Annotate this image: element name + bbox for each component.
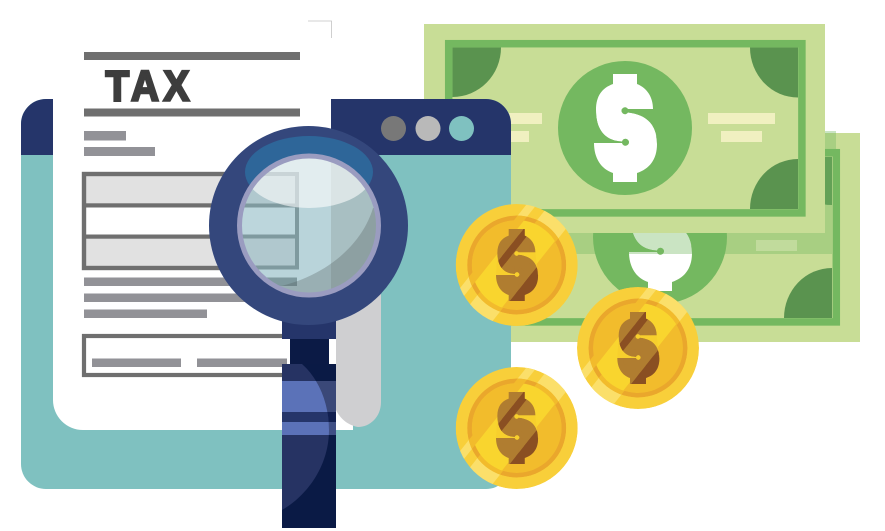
coin dollar sign: $	[498, 226, 536, 300]
lens glass	[242, 158, 376, 292]
form seen through lens	[242, 172, 299, 286]
bill corner: bottom right	[750, 159, 798, 209]
signature box	[84, 336, 299, 375]
window button: grey	[381, 116, 406, 141]
coin top	[456, 204, 578, 326]
coin right	[577, 287, 699, 409]
lens glare	[253, 158, 366, 208]
form table	[84, 174, 297, 268]
bill centre medallion	[558, 61, 692, 195]
text bars below form	[84, 278, 297, 318]
heading rule bottom	[84, 108, 300, 116]
coin dollar sign: $	[498, 389, 536, 463]
paper shadow	[331, 250, 381, 427]
bill dollar sign: $	[597, 68, 653, 180]
window button: light grey	[416, 116, 440, 141]
window title bar	[21, 99, 511, 155]
coin dollar sign: $	[498, 389, 536, 463]
lens rim	[240, 156, 378, 295]
coin dollar sign: $	[619, 309, 657, 383]
lens frame	[209, 126, 408, 325]
coin dollar sign: $	[498, 226, 536, 300]
paper sheet	[53, 21, 353, 430]
browser window	[21, 99, 511, 489]
heading: TAX: TAX	[106, 62, 189, 110]
tax document	[53, 21, 381, 430]
handle neck	[290, 339, 329, 364]
bill right text lines	[708, 113, 775, 142]
heading rule top	[84, 52, 300, 60]
frame highlight	[245, 136, 373, 208]
short text bars	[84, 131, 155, 156]
window body	[21, 99, 511, 489]
window button: teal	[449, 116, 474, 141]
bill corner: top left	[452, 48, 501, 97]
handle grip	[282, 364, 336, 528]
bill left text lines	[475, 113, 542, 142]
back dollar bill	[459, 133, 860, 342]
back dollar bill: $	[632, 177, 688, 289]
bill corner: top right	[750, 48, 798, 98]
handle collar	[282, 320, 336, 339]
coin bottom	[456, 367, 578, 489]
front dollar bill	[424, 24, 825, 233]
lens shadow crescent	[280, 208, 376, 292]
coin dollar sign: $	[619, 309, 657, 383]
shadow of front bill on back bill	[511, 131, 836, 254]
magnifying glass	[209, 126, 408, 528]
